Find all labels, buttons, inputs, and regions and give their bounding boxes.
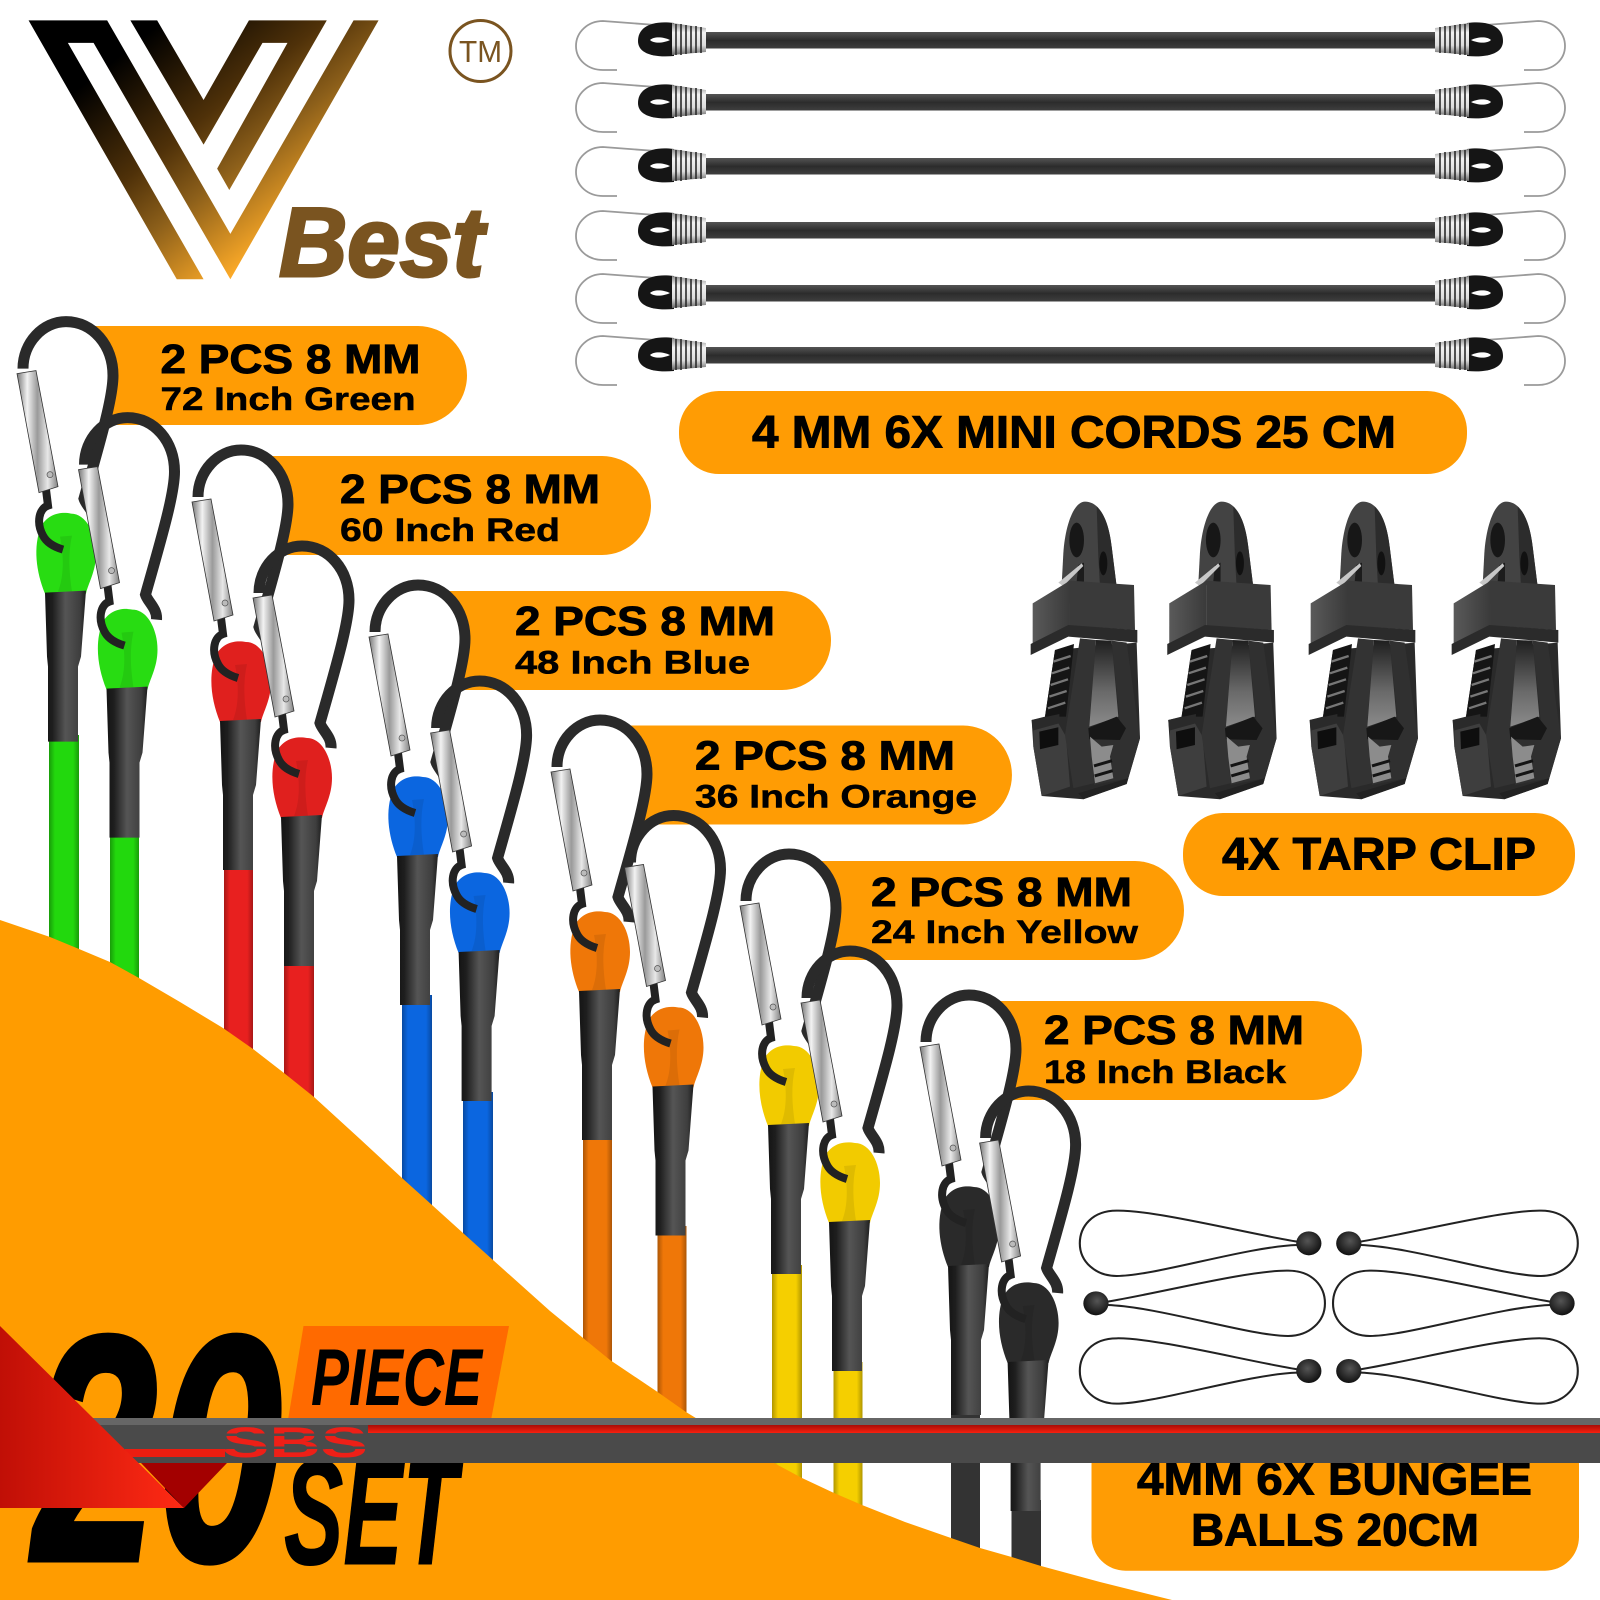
word piece: PIECE [311, 1333, 484, 1423]
piece tag background [288, 1326, 509, 1420]
orange corner background [0, 920, 1172, 1600]
label: bungee balls: 4MM 6X BUNGEE [1137, 1454, 1532, 1504]
label: 48 inch blue: 2 PCS 8 MM [515, 598, 775, 644]
panel: bungee balls [1080, 1211, 1579, 1571]
bungee cords: yellow [740, 854, 897, 1600]
label: 36 inch orange: 2 PCS 8 MM [695, 732, 955, 778]
ribbon bar [0, 1418, 1600, 1467]
label: 48 inch blue [443, 591, 831, 690]
label: 72 inch green: 2 PCS 8 MM [160, 336, 420, 382]
label: bungee balls [1092, 1430, 1579, 1571]
bungee cords: black [920, 995, 1076, 1600]
bungee ball loops [1080, 1211, 1578, 1404]
bungee cords: blue [369, 585, 527, 1392]
badge: 20 piece set [30, 1270, 509, 1600]
logo: VBest [29, 20, 487, 297]
logo mark: V chevrons [29, 20, 379, 279]
label: mini cords [679, 391, 1467, 474]
label: 18 inch black: 18 Inch Black [1044, 1054, 1286, 1090]
label: 24 inch yellow: 2 PCS 8 MM [871, 869, 1132, 915]
label: 36 inch orange: 36 Inch Orange [695, 778, 977, 814]
label: mini cords: 4 MM 6X MINI CORDS 25 CM [752, 406, 1396, 458]
label: tarp clip [1183, 813, 1575, 896]
bungee cords: red [192, 450, 349, 1258]
trademark badge [450, 20, 511, 82]
logo wordmark: Best [279, 187, 487, 297]
bungee cords: orange [551, 720, 720, 1546]
label: 18 inch black: 2 PCS 8 MM [1044, 1007, 1304, 1053]
label: bungee balls: BALLS 20CM [1191, 1504, 1479, 1556]
tarp clip icons [1031, 502, 1561, 799]
label: tarp clip: 4X TARP CLIP [1222, 828, 1536, 880]
label: 72 inch green: 72 Inch Green [160, 381, 416, 417]
panel: mini cords [576, 21, 1565, 474]
label: 60 inch red: 2 PCS 8 MM [340, 466, 600, 512]
panel: tarp clips [1031, 502, 1575, 896]
label: 36 inch orange [625, 726, 1012, 824]
label: 60 inch red: 60 Inch Red [340, 512, 560, 548]
word set: SET [284, 1428, 464, 1596]
trademark badge: TM [459, 34, 502, 69]
label: 24 inch yellow: 24 Inch Yellow [871, 914, 1138, 950]
label: 18 inch black [994, 1001, 1362, 1100]
label: 72 inch green [91, 326, 467, 425]
red corner fold [0, 1326, 227, 1508]
label: 24 inch yellow [814, 861, 1184, 960]
label: 60 inch red [266, 456, 651, 555]
ribbon logo: SBS [222, 1419, 368, 1467]
bungee cords: green [17, 322, 174, 1130]
mini cord rows [576, 21, 1565, 385]
label: 48 inch blue: 48 Inch Blue [515, 644, 750, 680]
